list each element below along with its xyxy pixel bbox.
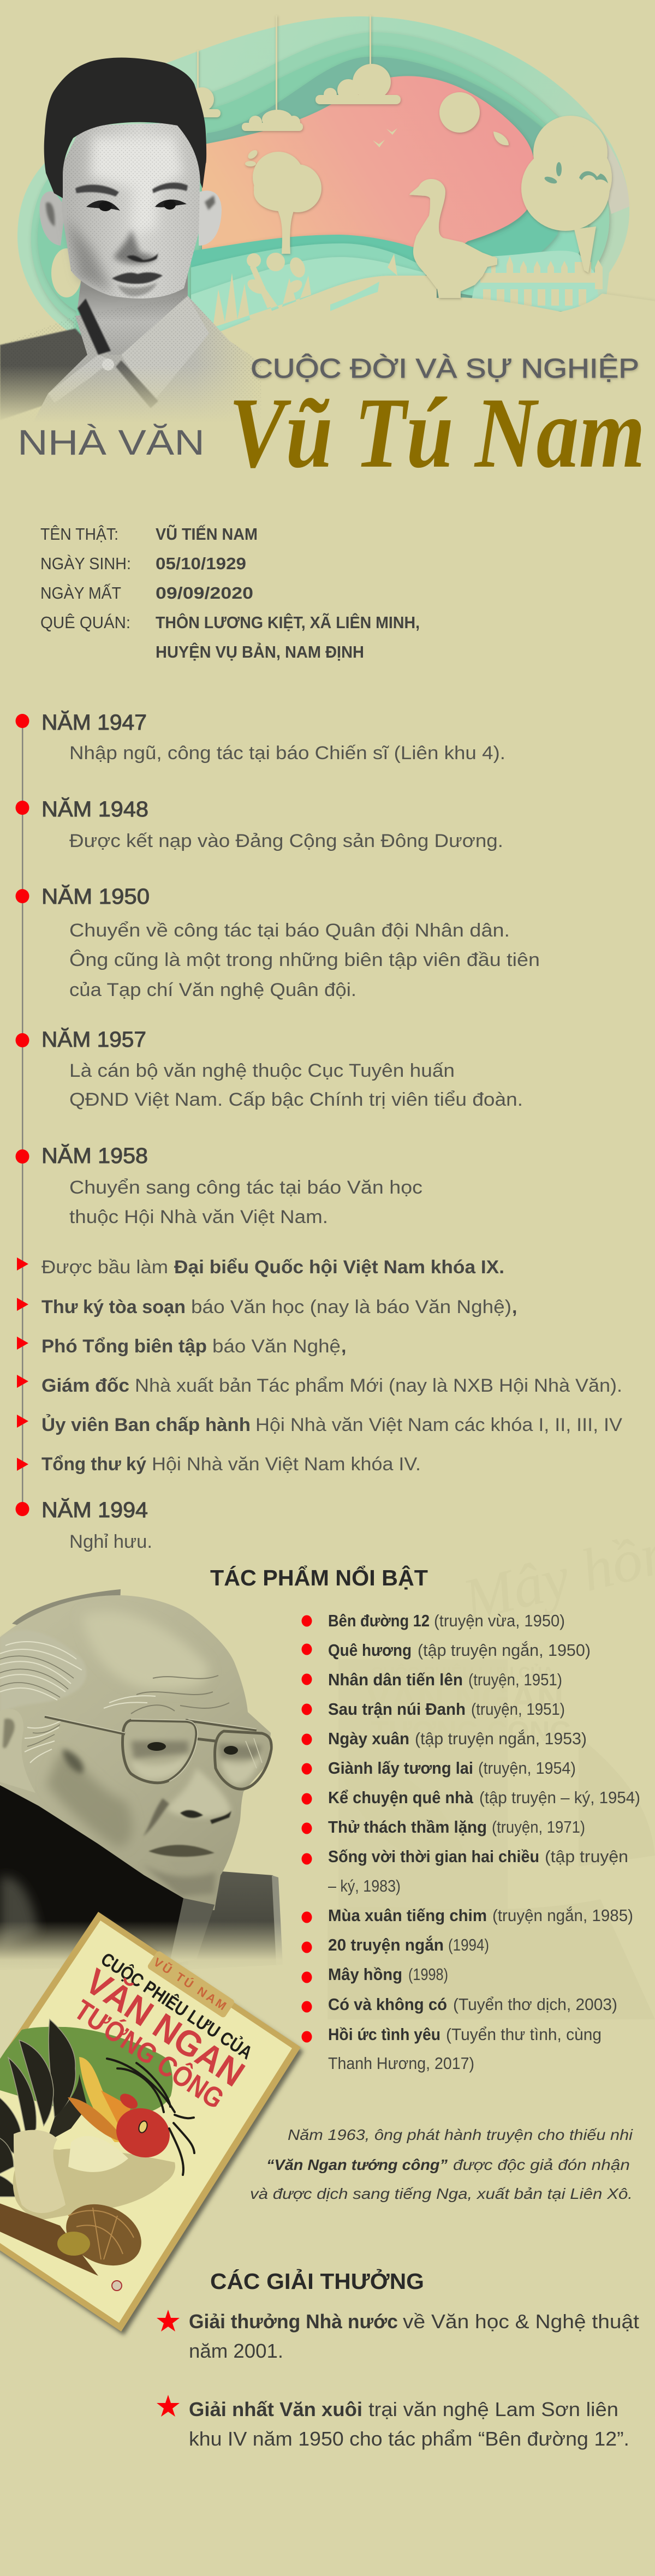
award 1: Giải thưởng Nhà nước bbox=[189, 2310, 398, 2333]
hill base bbox=[186, 344, 655, 404]
work 11 bbox=[301, 1935, 489, 1954]
hair bbox=[44, 57, 206, 198]
brows bbox=[75, 183, 188, 196]
role: deputy: Đại biểu Quốc hội Việt Nam khóa IX. bbox=[174, 1257, 504, 1278]
under-eye light bbox=[131, 1755, 262, 1785]
shirt bbox=[33, 296, 262, 423]
award 2: Giải nhất Văn xuôi bbox=[189, 2398, 362, 2420]
role: deputy: Được bầu làm bbox=[41, 1257, 168, 1278]
work 10 bbox=[301, 1906, 633, 1925]
entry 1958: Chuyển sang công tác tại báo Văn học bbox=[69, 1177, 422, 1198]
green strip on hill bbox=[330, 282, 379, 311]
leaf marks on big tree bbox=[544, 162, 608, 185]
author tag bbox=[147, 1950, 235, 2019]
hair strands light bbox=[0, 1642, 156, 1763]
work 1 bbox=[301, 1611, 565, 1630]
work 4: Sau trận núi Đanh bbox=[328, 1700, 466, 1719]
glasses bbox=[45, 1715, 271, 1789]
award 2: trại văn nghệ Lam Sơn liên bbox=[368, 2398, 618, 2420]
work 3 bbox=[301, 1670, 562, 1689]
hometown bbox=[40, 612, 420, 661]
hometown: QUÊ QUÁN: bbox=[40, 613, 130, 632]
role: deputy editor: Phó Tổng biên tập bbox=[41, 1336, 207, 1357]
book title line two: TƯỚNG CÔNG bbox=[69, 1994, 230, 2115]
nostrils bbox=[127, 253, 158, 262]
small logo bbox=[112, 2281, 122, 2291]
turtle head bbox=[57, 2232, 90, 2256]
timeline axis bbox=[22, 721, 23, 1509]
work 7: Kể chuyện quê nhà bbox=[328, 1788, 474, 1807]
work 12 bbox=[301, 1965, 448, 1984]
lower lip bbox=[117, 283, 157, 296]
eyes bbox=[147, 1742, 238, 1755]
work 14 bbox=[301, 2025, 602, 2073]
shell pattern bbox=[68, 2208, 134, 2259]
big tree bbox=[521, 116, 612, 273]
work 8 bbox=[301, 1817, 585, 1836]
entry 1948 bbox=[15, 797, 503, 851]
personal info bbox=[40, 524, 420, 661]
hero paper-cut landscape illustration bbox=[17, 16, 655, 336]
halftone texture bbox=[0, 123, 262, 423]
book cover: Cuộc phiêu lưu của Văn Ngan tướng công bbox=[0, 1912, 301, 2331]
entry 1950: NĂM 1950 bbox=[41, 884, 150, 909]
work 13: Có và không có bbox=[328, 1995, 447, 2014]
birth date bbox=[40, 554, 246, 573]
cheek shadow bbox=[67, 218, 112, 292]
death date: 09/09/2020 bbox=[156, 583, 253, 603]
faint book covers watermark: TƯỚNG CÔNG bbox=[371, 1715, 572, 1748]
work 4: (truyện, 1951) bbox=[471, 1700, 565, 1719]
work 2 bbox=[301, 1641, 591, 1660]
birth date: 05/10/1929 bbox=[156, 554, 246, 573]
icon: red star bbox=[157, 2310, 180, 2331]
note about Văn Ngan tướng công: được độc giả đón nhận bbox=[453, 2156, 630, 2173]
white hair side bbox=[0, 1630, 86, 1714]
crest strokes bbox=[107, 2059, 194, 2175]
coat edge zipper bbox=[272, 1875, 283, 1965]
role: secretary: , bbox=[512, 1297, 517, 1317]
entry 1948: Được kết nạp vào Đảng Cộng sản Đông Dương. bbox=[69, 831, 503, 851]
mouth bbox=[112, 272, 163, 284]
role: deputy editor: báo Văn Nghệ bbox=[212, 1336, 341, 1357]
entry 1950: Chuyển về công tác tại báo Quân đội Nhân dân. bbox=[69, 920, 510, 941]
role: general secretary: Tổng thư ký bbox=[41, 1454, 146, 1475]
work 5 bbox=[301, 1729, 587, 1748]
role: deputy bbox=[17, 1257, 504, 1278]
cloud behind portrait bbox=[188, 50, 221, 117]
note about Văn Ngan tướng công: “Văn Ngan tướng công” bbox=[266, 2156, 448, 2173]
list of notable works bbox=[301, 1611, 640, 2073]
zipper bbox=[169, 1898, 215, 1965]
green leaf bbox=[0, 2027, 172, 2115]
work 1: (truyện vừa, 1950) bbox=[434, 1611, 565, 1630]
work 7 bbox=[301, 1788, 640, 1807]
entry 1950 bbox=[15, 884, 540, 1000]
log bbox=[0, 2199, 98, 2276]
role: executive board: Hội Nhà văn Việt Nam các khóa I, II, III, IV bbox=[255, 1415, 622, 1435]
entry 1958: NĂM 1958 bbox=[41, 1143, 148, 1168]
hometown: THÔN LƯƠNG KIỆT, XÃ LIÊN MINH, bbox=[156, 612, 420, 632]
lip lower bbox=[169, 1856, 214, 1873]
cloud at left loop bbox=[51, 248, 82, 297]
wing white bbox=[14, 2130, 66, 2213]
work 6 bbox=[301, 1758, 576, 1778]
work 1: Bên đường 12 bbox=[328, 1611, 430, 1630]
role: director: Giám đốc bbox=[41, 1375, 129, 1396]
entry 1957: NĂM 1957 bbox=[41, 1027, 146, 1052]
heading: awards: CÁC GIẢI THƯỞNG bbox=[210, 2269, 424, 2294]
work 10: Mùa xuân tiếng chim bbox=[328, 1906, 487, 1925]
award 2: khu IV năm 1950 cho tác phẩm “Bên đường 12”. bbox=[189, 2428, 629, 2450]
portrait of elderly Vũ Tú Nam bbox=[0, 1589, 289, 1976]
death date bbox=[40, 583, 253, 603]
upper beak bbox=[79, 2057, 120, 2142]
title block bbox=[17, 353, 645, 489]
cover text bbox=[63, 1927, 274, 2117]
cover frame bbox=[0, 1912, 301, 2331]
work 9 bbox=[301, 1847, 628, 1895]
collar button bbox=[102, 359, 114, 371]
death date: NGÀY MẤT bbox=[40, 583, 121, 603]
faint book covers watermark bbox=[327, 1511, 655, 2019]
role: secretary bbox=[17, 1297, 517, 1317]
fence backdrop bbox=[469, 251, 600, 311]
work 12: Mây hồng bbox=[328, 1965, 402, 1984]
award 1: năm 2001. bbox=[189, 2340, 283, 2362]
book title line one: VĂN NGAN bbox=[79, 1960, 252, 2094]
entry 1947: NĂM 1947 bbox=[41, 710, 147, 735]
award 2 bbox=[157, 2395, 629, 2450]
ear right bbox=[199, 190, 222, 246]
heading: notable works: TÁC PHẨM NỔI BẬT bbox=[210, 1565, 428, 1590]
cheek shading bbox=[46, 1752, 133, 1847]
cover paper bbox=[0, 1921, 292, 2323]
black coat collar bbox=[0, 1785, 188, 1970]
icon: red star bbox=[157, 2395, 180, 2417]
nose shadow bbox=[114, 229, 157, 264]
author name: VŨ TÚ NAM bbox=[151, 1955, 230, 2014]
neck and body bbox=[13, 2148, 175, 2220]
role: deputy editor bbox=[17, 1336, 346, 1357]
work 6: (truyện, 1954) bbox=[478, 1758, 576, 1778]
face bbox=[62, 123, 200, 299]
nasolabial fold bbox=[143, 1798, 169, 1836]
timeline bbox=[15, 710, 622, 1552]
work 9: Sống vời thời gian hai chiều bbox=[328, 1847, 539, 1866]
work 9: (tập truyện bbox=[545, 1847, 628, 1866]
role: executive board bbox=[17, 1415, 622, 1435]
label writer: NHÀ VĂN bbox=[17, 422, 205, 462]
bird eye bbox=[138, 2120, 148, 2133]
work 10: (truyện ngắn, 1985) bbox=[492, 1906, 633, 1925]
work 14: Hồi ức tình yêu bbox=[328, 2025, 440, 2044]
ear inner bbox=[3, 1719, 15, 1748]
eye socket shade bbox=[131, 1741, 262, 1758]
faint book covers watermark: VĂN NGAN bbox=[366, 1678, 564, 1719]
hometown: HUYỆN VỤ BẢN, NAM ĐỊNH bbox=[156, 642, 364, 661]
coat back right bbox=[66, 1871, 282, 1976]
entry 1994 bbox=[15, 1498, 152, 1552]
work 12: (1998) bbox=[408, 1965, 448, 1984]
entry 1947: Nhập ngũ, công tác tại báo Chiến sĩ (Liên khu 4). bbox=[69, 743, 505, 764]
real name: VŨ TIẾN NAM bbox=[156, 524, 258, 544]
work 14: Thanh Hương, 2017) bbox=[328, 2054, 474, 2073]
entry 1957: QĐND Việt Nam. Cấp bậc Chính trị viên tiểu đoàn. bbox=[69, 1089, 523, 1110]
entry 1994: Nghỉ hưu. bbox=[69, 1531, 152, 1552]
small tree bbox=[245, 148, 321, 254]
shoulder left bbox=[0, 329, 98, 420]
work 5: Ngày xuân bbox=[328, 1729, 409, 1748]
nose bbox=[166, 1768, 230, 1817]
note about Văn Ngan tướng công: Năm 1963, ông phát hành truyện cho thiếu nhi bbox=[288, 2126, 633, 2143]
work 5: (tập truyện ngắn, 1953) bbox=[415, 1729, 587, 1748]
role: executive board: Ủy viên Ban chấp hành bbox=[41, 1415, 251, 1435]
dark feather shadow bbox=[49, 2074, 87, 2137]
placket shadow bbox=[116, 360, 158, 408]
work 13: (Tuyển thơ dịch, 2003) bbox=[453, 1995, 617, 2014]
nostril shadow bbox=[180, 1810, 231, 1824]
work 9: – ký, 1983) bbox=[328, 1876, 401, 1895]
pale breast bbox=[68, 2136, 128, 2172]
role: deputy editor: , bbox=[341, 1336, 346, 1357]
collar left bbox=[48, 355, 112, 403]
birth date: NGÀY SINH: bbox=[40, 554, 131, 573]
forehead wrinkles bbox=[131, 1675, 229, 1714]
role: secretary: Thư ký tòa soạn bbox=[41, 1297, 186, 1317]
collar fold sheen bbox=[0, 1876, 38, 1948]
subtitle: CUỘC ĐỜI VÀ SỰ NGHIỆP bbox=[251, 353, 639, 384]
work 8: (truyện, 1971) bbox=[492, 1817, 585, 1836]
falling leaf bbox=[493, 132, 509, 145]
cloud medium bbox=[242, 15, 303, 131]
red head bbox=[116, 2094, 170, 2158]
goose bbox=[409, 179, 497, 298]
black tail feathers bbox=[0, 2019, 75, 2197]
ear bbox=[0, 1709, 35, 1793]
work 13 bbox=[301, 1995, 617, 2014]
work 14: (Tuyển thư tình, cùng bbox=[446, 2025, 602, 2044]
role: secretary: báo Văn học (nay là báo Văn Nghệ) bbox=[191, 1297, 511, 1317]
cover illustration bbox=[0, 2019, 194, 2291]
birds bbox=[373, 128, 397, 147]
collar right bbox=[121, 296, 209, 403]
entry 1947 bbox=[15, 710, 505, 764]
entry 1957: Là cán bộ văn nghệ thuộc Cục Tuyên huấn bbox=[69, 1060, 455, 1081]
lower beak bbox=[68, 2097, 119, 2140]
portrait of young Vũ Tú Nam bbox=[0, 57, 267, 423]
moon bbox=[439, 92, 480, 133]
work 4 bbox=[301, 1700, 565, 1719]
work 3: Nhân dân tiến lên bbox=[328, 1670, 463, 1689]
work 6: Giành lấy tương lai bbox=[328, 1758, 473, 1778]
entry 1958 bbox=[15, 1143, 422, 1227]
work 8: Thử thách thầm lặng bbox=[328, 1817, 487, 1836]
coat fade bbox=[0, 1921, 289, 1973]
note about Văn Ngan tướng công bbox=[250, 2126, 633, 2202]
note about Văn Ngan tướng công: và được dịch sang tiếng Nga, xuất bản tại Liên Xô. bbox=[250, 2185, 633, 2202]
work 7: (tập truyện – ký, 1954) bbox=[479, 1788, 640, 1807]
entry 1994: NĂM 1994 bbox=[41, 1498, 148, 1522]
head bbox=[0, 1595, 271, 1910]
real name bbox=[40, 524, 258, 544]
portrait fade bbox=[0, 366, 267, 423]
ear right inner bbox=[205, 195, 215, 210]
work 11: 20 truyện ngắn bbox=[328, 1935, 444, 1954]
ear left inner bbox=[46, 202, 55, 226]
turtle shell bbox=[66, 2204, 141, 2266]
real name: TÊN THẬT: bbox=[40, 524, 118, 544]
cheek blemish bbox=[63, 1749, 84, 1774]
orange cheek bbox=[101, 2090, 130, 2123]
chin shade bbox=[142, 1864, 216, 1897]
hair strands dark bbox=[0, 1656, 74, 1746]
ear left bbox=[39, 192, 66, 246]
entry 1950: Ông cũng là một trong những biên tập viên đầu tiên bbox=[69, 950, 540, 970]
eyes bbox=[86, 200, 187, 211]
work 3: (truyện, 1951) bbox=[468, 1670, 562, 1689]
role: general secretary bbox=[17, 1454, 421, 1475]
foreground cream hill bbox=[186, 276, 655, 393]
role: general secretary: Hội Nhà văn Việt Nam khóa IV. bbox=[152, 1454, 421, 1475]
forehead highlight bbox=[82, 1612, 209, 1690]
hair top band bbox=[12, 1589, 121, 1629]
cloud large bbox=[315, 15, 401, 104]
entry 1958: thuộc Hội Nhà văn Việt Nam. bbox=[69, 1207, 328, 1227]
entry 1950: của Tạp chí Văn nghệ Quân đội. bbox=[69, 980, 356, 1000]
faint book covers watermark: CUỘC PHIÊU LƯU CỦA bbox=[371, 1663, 554, 1682]
collar dark edge bbox=[78, 299, 111, 355]
work 11: (1994) bbox=[448, 1935, 489, 1954]
award 1 bbox=[157, 2310, 639, 2362]
entry 1957 bbox=[15, 1027, 523, 1110]
mouth bbox=[148, 1845, 215, 1857]
entry 1948: NĂM 1948 bbox=[41, 797, 148, 821]
forehead and nose highlight bbox=[90, 136, 183, 235]
work 2: Quê hương bbox=[328, 1641, 412, 1660]
award 1: về Văn học & Nghệ thuật bbox=[403, 2310, 639, 2333]
work 2: (tập truyện ngắn, 1950) bbox=[418, 1641, 591, 1660]
book series title: CUỘC PHIÊU LƯU CỦA bbox=[97, 1948, 257, 2064]
grass and flowers bbox=[213, 253, 397, 327]
role: director: Nhà xuất bản Tác phẩm Mới (nay là NXB Hội Nhà Văn). bbox=[135, 1375, 622, 1396]
neck bbox=[78, 273, 188, 355]
picket fence bbox=[480, 256, 603, 306]
